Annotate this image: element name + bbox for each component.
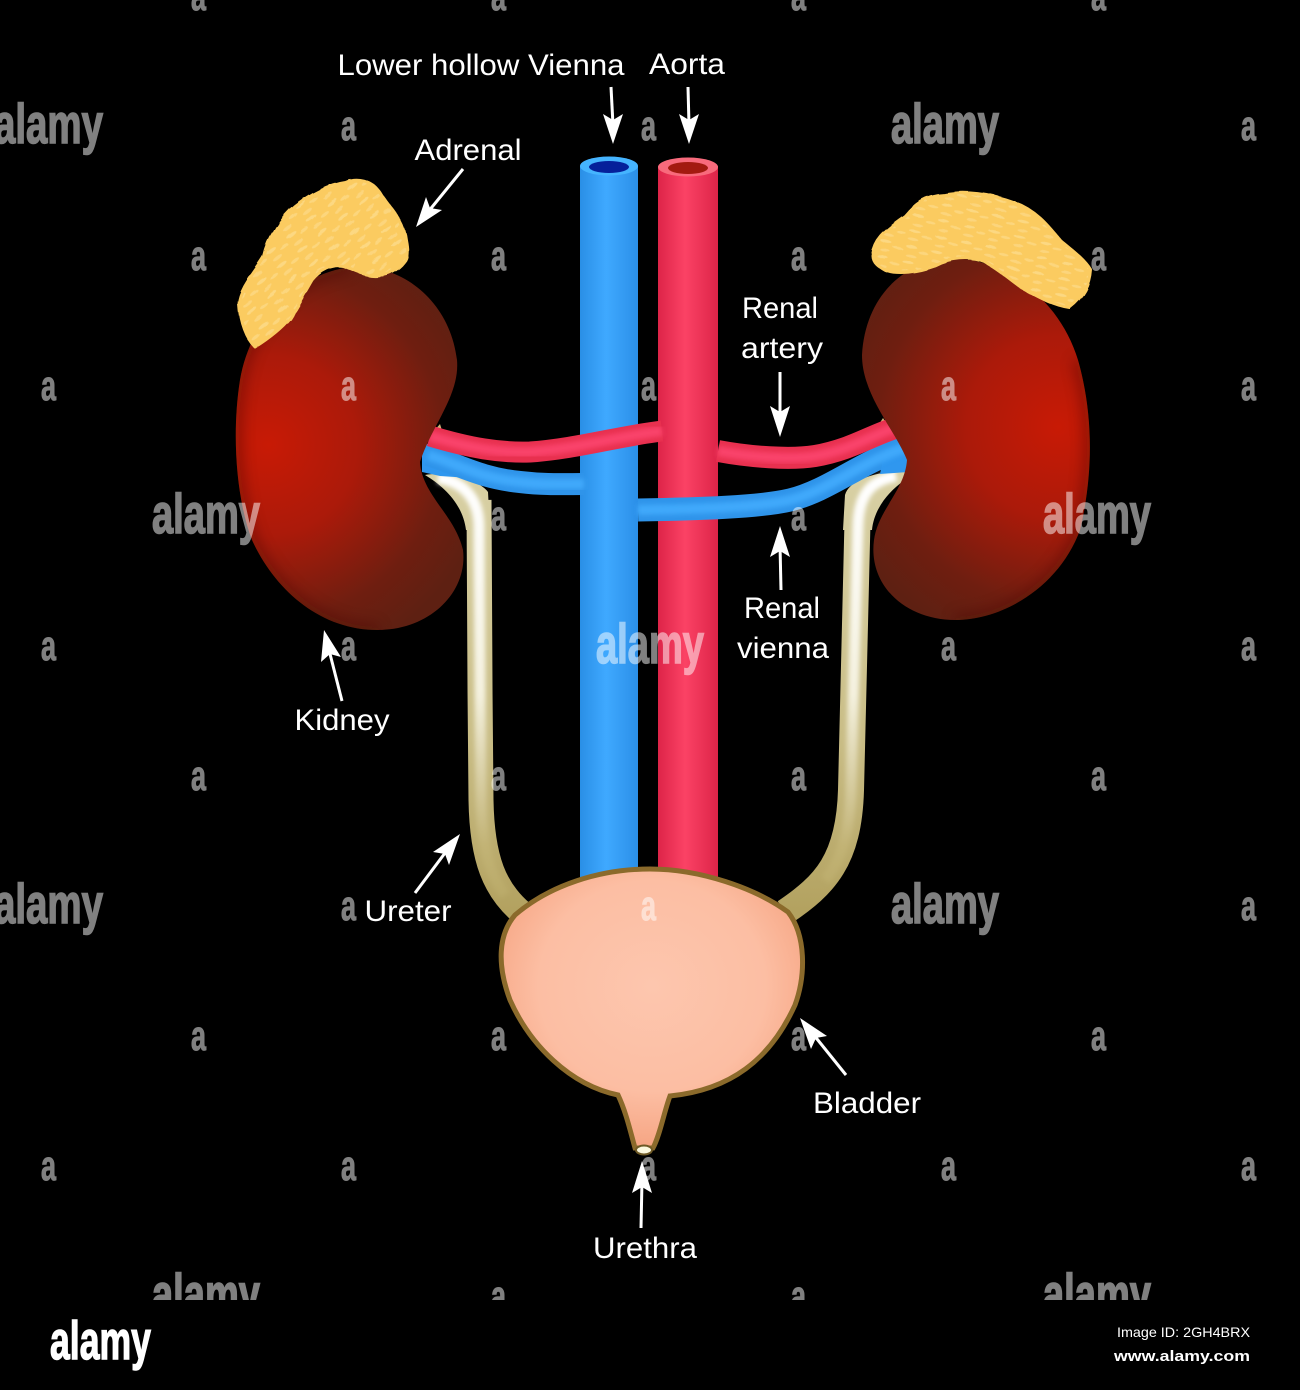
watermark: small a marks: a <box>1241 1142 1256 1189</box>
watermark: small a marks: a <box>941 362 956 409</box>
watermark: small a marks: a <box>491 752 506 799</box>
watermark: alamy logos: alamy <box>1043 482 1151 545</box>
watermark: small a marks: a <box>41 622 56 669</box>
watermark: small a marks: a <box>791 1012 806 1059</box>
right renal artery <box>718 428 895 458</box>
watermark: small a marks: a <box>341 882 356 929</box>
arrow: adrenal <box>416 169 463 227</box>
watermark: small a marks: a <box>1091 1012 1106 1059</box>
left renal vein <box>422 440 584 484</box>
watermark: small a marks: a <box>491 232 506 279</box>
watermark: small a marks: a <box>41 362 56 409</box>
watermark: small a marks: a <box>341 102 356 149</box>
watermark: alamy logos <box>0 92 1151 1325</box>
label: aorta: Aorta <box>649 48 725 81</box>
watermark: small a marks: a <box>941 622 956 669</box>
label: bladder: Bladder <box>813 1087 921 1120</box>
watermark: alamy logos: alamy <box>152 1262 260 1325</box>
watermark: small a marks: a <box>1241 362 1256 409</box>
watermark: small a marks: a <box>1241 622 1256 669</box>
watermark: small a marks: a <box>791 752 806 799</box>
right adrenal gland <box>872 193 1091 308</box>
watermark: small a marks: a <box>791 492 806 539</box>
watermark: small a marks: a <box>791 232 806 279</box>
watermark: small a marks: a <box>341 362 356 409</box>
watermark: alamy logos: alamy <box>596 612 704 675</box>
label: urethra: Urethra <box>593 1232 697 1265</box>
right renal vein <box>638 440 908 510</box>
labels <box>294 48 921 1265</box>
label: renal vienna <box>737 592 829 665</box>
arrow: lower hollow vena <box>603 87 623 144</box>
watermark: small a marks: a <box>191 1012 206 1059</box>
image id: Image ID: 2GH4BRX <box>1117 1324 1251 1340</box>
inferior vena cava <box>580 166 638 886</box>
label: adrenal: Adrenal <box>414 134 522 167</box>
watermark: small a marks: a <box>41 1142 56 1189</box>
left adrenal gland <box>239 180 407 347</box>
watermark: small a marks: a <box>191 752 206 799</box>
label: lower hollow vienna: Lower hollow Vienna <box>338 49 625 82</box>
right ureter <box>785 418 905 912</box>
urethra opening <box>636 1146 652 1154</box>
left renal artery <box>430 431 662 452</box>
watermark: alamy logos: alamy <box>1043 1262 1151 1325</box>
footer logo: alamy <box>50 1311 151 1371</box>
watermark: small a marks: a <box>341 622 356 669</box>
label: renal artery <box>741 292 823 365</box>
label: kidney: Kidney <box>294 704 390 737</box>
watermark: small a marks: a <box>641 362 656 409</box>
watermark: alamy logos: alamy <box>891 92 999 155</box>
watermark: small a marks: a <box>941 1142 956 1189</box>
watermark: small a marks: a <box>341 1142 356 1189</box>
label: renal artery: artery <box>741 332 823 365</box>
label: ureter: Ureter <box>364 895 452 928</box>
footer bar <box>0 1300 1300 1390</box>
watermark: small a marks: a <box>491 1012 506 1059</box>
arrows <box>321 87 846 1228</box>
arrow: urethra <box>632 1161 652 1228</box>
watermark: small a marks: a <box>491 492 506 539</box>
left ureter <box>425 424 522 913</box>
watermark: small a marks: a <box>641 102 656 149</box>
watermark: small a marks: a <box>641 882 656 929</box>
aorta opening <box>658 158 718 176</box>
watermark: small a marks: a <box>1091 752 1106 799</box>
aorta <box>658 166 718 886</box>
vena cava opening <box>580 156 638 176</box>
arrow: kidney <box>321 630 342 701</box>
arrow: bladder <box>800 1018 846 1075</box>
label: renal vienna: Renal <box>744 592 820 625</box>
watermark: small a marks: a <box>791 1272 806 1319</box>
label: renal vienna: vienna <box>737 632 829 665</box>
arrow: renal vein <box>770 526 790 590</box>
watermark: small a marks: a <box>641 1142 656 1189</box>
arrow: ureter <box>415 834 460 893</box>
label: renal artery: Renal <box>742 292 818 325</box>
left kidney <box>236 267 463 630</box>
watermark: small a marks: a <box>1241 102 1256 149</box>
watermark: alamy logos: alamy <box>152 482 260 545</box>
watermark: small a marks: a <box>491 1272 506 1319</box>
watermark: small a marks: a <box>191 232 206 279</box>
arrow: aorta <box>679 87 699 144</box>
right kidney <box>862 258 1090 620</box>
watermark: alamy logos: alamy <box>891 872 999 935</box>
arrow: renal artery <box>770 372 790 437</box>
watermark: small a marks: a <box>1091 232 1106 279</box>
bladder <box>501 869 803 1148</box>
watermark: small a marks: a <box>1241 882 1256 929</box>
website: www.alamy.com <box>1113 1348 1250 1365</box>
